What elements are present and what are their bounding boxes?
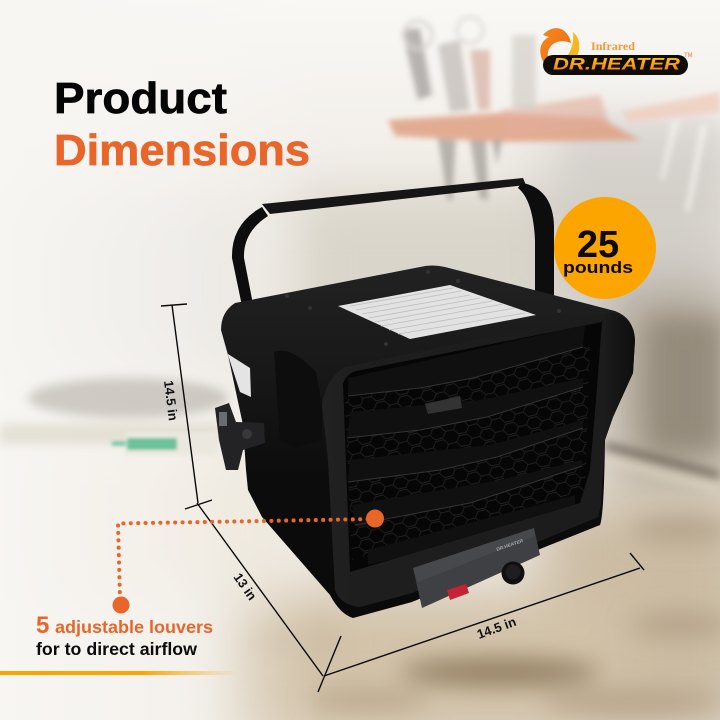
heating element glint — [425, 396, 462, 414]
width label: 14.5 in — [475, 614, 518, 642]
screws — [285, 270, 561, 346]
panel upper face — [413, 528, 535, 582]
background syringe — [112, 432, 217, 455]
trademark: TM — [684, 53, 693, 59]
background: faded tools rack — [388, 17, 720, 212]
pointer dot at text — [112, 596, 130, 614]
pointer dot on louver — [366, 510, 384, 528]
weight unit: pounds — [563, 258, 633, 277]
louvers — [347, 325, 585, 565]
accent bar — [0, 671, 236, 675]
logo: Dr. Heater — [540, 28, 693, 75]
top warning label — [338, 285, 536, 339]
depth label: 13 in — [231, 570, 260, 603]
callout heading: adjustable louvers — [55, 617, 213, 637]
heater handle — [232, 178, 554, 330]
title line 2: Dimensions — [54, 126, 310, 175]
callout number: 5 — [36, 612, 49, 639]
front opening — [343, 322, 602, 572]
right strap — [518, 183, 554, 296]
title — [54, 74, 310, 175]
icon: flame tip — [567, 32, 579, 56]
side sticker — [228, 354, 251, 397]
side recess — [274, 351, 322, 448]
dimension: height 14.5 in — [161, 304, 212, 509]
weight badge — [554, 197, 656, 299]
heater body — [221, 266, 635, 618]
height label: 14.5 in — [161, 380, 181, 422]
background: floor details — [0, 378, 720, 492]
weight number: 25 — [577, 224, 619, 266]
panel logo: DR.HEATER — [496, 538, 525, 552]
brand pill — [543, 55, 688, 75]
thermostat knob — [502, 562, 524, 584]
dimension: width 14.5 in — [324, 553, 644, 676]
label text lines — [350, 288, 525, 334]
heater product — [215, 178, 635, 618]
red power switch — [447, 584, 469, 600]
handle grip — [262, 178, 526, 214]
side adjustment knob — [215, 403, 265, 470]
control panel — [413, 528, 540, 608]
louver highlights — [347, 347, 583, 525]
brand word: DR.HEATER: DR.HEATER — [553, 54, 681, 74]
left strap — [232, 207, 268, 330]
front frame — [322, 312, 635, 607]
mesh grille — [345, 325, 590, 565]
dimension: depth 13 in — [197, 503, 341, 692]
brand word: Infrared: Infrared — [591, 41, 636, 53]
callout text — [36, 612, 213, 659]
callout: louver pointer — [112, 510, 384, 614]
icon: flame — [540, 28, 571, 66]
callout description: for to direct airflow — [36, 639, 197, 659]
title line 1: Product — [54, 74, 227, 123]
